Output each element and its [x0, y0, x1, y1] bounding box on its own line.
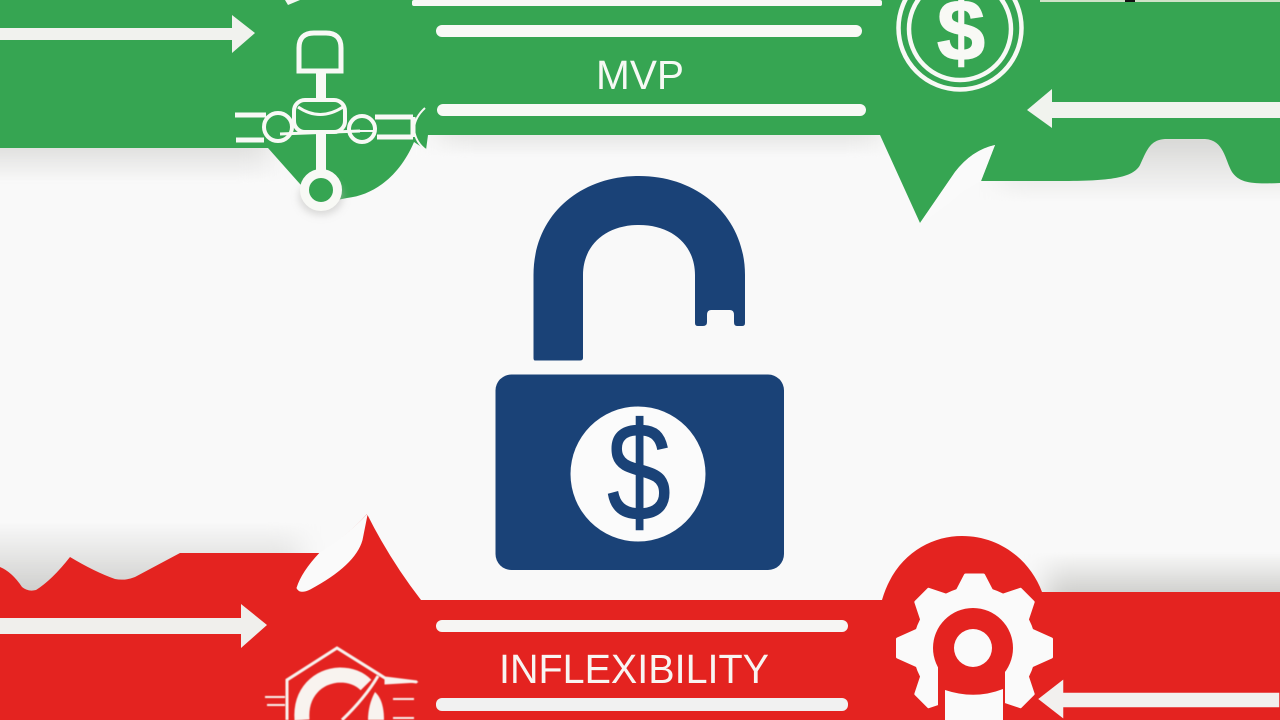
lock body: [496, 374, 784, 570]
dollar circle: [570, 406, 706, 542]
panel: green MVP band: [0, 0, 1280, 223]
icon: satellite: [235, 33, 426, 215]
white notch in tail: [920, 145, 995, 223]
dollar sign: $: [607, 394, 671, 551]
icon: shield house: [265, 648, 418, 720]
arrow: right pointing left: [1037, 678, 1280, 720]
icon: dollar coin: [898, 0, 1022, 90]
lock shackle: [534, 176, 745, 360]
heading: MVP: MVP: [596, 52, 684, 98]
arrow: right pointing left: [1027, 89, 1280, 128]
white sliver: [297, 515, 367, 591]
line above MVP: [436, 25, 862, 37]
heading: INFLEXIBILITY: INFLEXIBILITY: [499, 646, 769, 692]
arrow: left pointing right: [0, 604, 267, 648]
red band shape: [0, 514, 1280, 720]
line below MVP: [437, 104, 866, 116]
top strip: [285, 0, 1280, 6]
line above Inflexibility: [436, 620, 848, 632]
icon: gear: [898, 575, 1052, 720]
panel: padlock with dollar sign: [496, 176, 784, 570]
panel: red Inflexibility band: [0, 514, 1280, 720]
green band shape: [0, 0, 1280, 223]
line below Inflexibility: [436, 698, 848, 711]
arrow: left pointing right: [0, 15, 255, 53]
